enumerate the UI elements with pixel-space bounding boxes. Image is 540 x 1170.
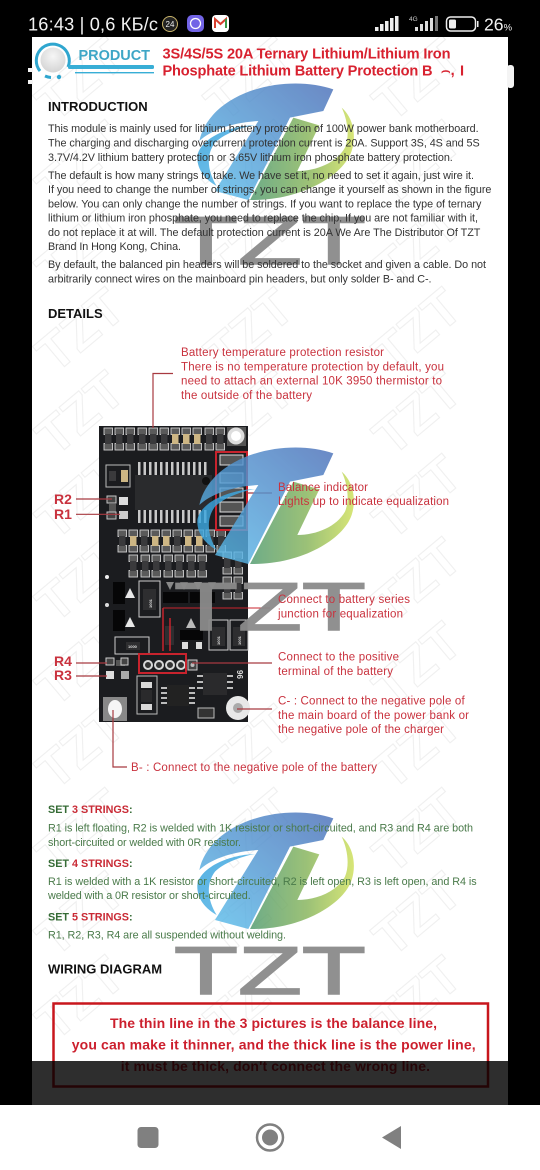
small diagonal TZT watermarks: TZT [26,862,136,968]
small diagonal TZT watermarks: TZT [363,612,473,718]
callout: series junction: junction for equalization [277,608,403,620]
app overlay tabs at sheet edges [28,65,514,88]
small diagonal TZT watermarks: TZT [363,27,473,133]
small diagonal TZT watermarks: TZT [195,111,305,217]
TZT wordmark top: TZT [174,202,366,279]
resistor labels [54,491,72,683]
icon: 4G signal [409,16,438,31]
introduction text: If you need to change the number of strings, you can change it yourself as shown in the figure [48,184,491,196]
highlight boxes on board [139,452,270,673]
callout: C-: C- : Connect to the negative pole of [278,696,465,708]
callout: balance indicator: Lights up to indicate equalization [278,496,449,508]
clock and network speed: 16:43 | 0,6 КБ/с [28,14,158,34]
small diagonal TZT watermarks [26,27,473,1052]
icon: 4G signal: 4G [409,16,418,23]
callout: temperature resistor: the outside of the battery [181,390,312,402]
introduction text: below. You can only change the number of strings. If you want to replace the type of ternary [48,198,482,210]
icon: nav square [138,1127,158,1148]
callout: positive terminal: terminal of the battery [278,666,393,678]
small diagonal TZT watermarks: TZT [363,695,473,801]
battery percent: 26% [484,14,513,34]
board resistors: 1001 [148,598,153,608]
board resistors: 1000 [128,644,138,649]
second and third component rows [118,530,242,599]
introduction text: Brand In Hong Kong, China. [48,241,181,253]
product header badge: PRODUCT [78,48,150,64]
balance indicator components [220,455,243,526]
small diagonal TZT watermarks: TZT [363,445,473,551]
small diagonal TZT watermarks: TZT [363,194,473,300]
introduction text [48,123,491,286]
small diagonal TZT watermarks: TZT [26,111,136,217]
small diagonal TZT watermarks: TZT [26,361,136,467]
white navigation bar [0,1105,540,1170]
TZT wordmark middle: TZT [174,568,366,645]
icon: nav home [257,1124,283,1150]
set 3 strings: short-circuited or welded with 0R resistor. [48,837,241,849]
small diagonal TZT watermarks: TZT [195,695,305,801]
product title: ⌢, [441,63,455,79]
small diagonal TZT watermarks: TZT [26,445,136,551]
set 4 strings [47,858,477,902]
warning box: you can make it thinner, and the thick line is the power line, [72,1036,476,1052]
board resistors: 1001 [237,635,242,645]
power transistors and diodes [105,575,216,649]
small diagonal TZT watermarks: TZT [363,779,473,885]
small diagonal TZT watermarks: TZT [26,946,136,1052]
introduction text: By default, the balanced pin headers will be soldered to the socket and given a cable. Do not [48,259,486,271]
main chip [135,462,212,523]
warning box: it must be thick, don't connect the wrong line. [121,1058,430,1074]
small diagonal TZT watermarks: TZT [195,27,305,133]
callout: temperature resistor: There is no temperature protection by default, you [181,362,444,374]
set 3 strings: R1 is left floating, R2 is welded with 1K resistor or short-circuited, and R3 and R4 are both [48,822,473,834]
small diagonal TZT watermarks: TZT [195,361,305,467]
R3 R4 pads [106,658,129,679]
callout: C-: the main board of the power bank or [278,710,469,722]
status bar [28,14,513,34]
small diagonal TZT watermarks: TZT [363,278,473,384]
small diagonal TZT watermarks: TZT [26,194,136,300]
set 5 strings: R1, R2, R3, R4 are all suspended without welding. [48,930,286,942]
lower chips: 96 [235,670,244,679]
small diagonal TZT watermarks: TZT [363,946,473,1052]
introduction text: The charging and discharging overcurrent protection current is 20A. Support 3S, 4S and 5S [48,138,480,150]
callout: temperature resistor: Battery temperature protection resistor [181,347,384,359]
set 3 strings: SET 3 STRINGS: [48,804,133,816]
small diagonal TZT watermarks: TZT [195,779,305,885]
product title: I [460,64,464,80]
introduction text: do not replace it at will. The default protection current is 20A We Are The Distributor Of TZT [48,227,481,239]
board resistors: 1001 [216,635,221,645]
small diagonal TZT watermarks: TZT [363,528,473,634]
small diagonal TZT watermarks: TZT [363,111,473,217]
callout: series junction [277,594,410,620]
introduction text: lithium or lithium iron phosphate, you need to replace the chip. If you are not familiar with it, [48,212,478,224]
small diagonal TZT watermarks: TZT [363,862,473,968]
callout: balance indicator [278,482,449,508]
product header badge [36,44,154,79]
callout: temperature resistor [181,347,444,402]
icon: viber [187,15,204,32]
TZT logo watermark bottom [197,812,354,929]
introduction text: This module is mainly used for lithium battery protection of 100W power bank motherboard. [48,123,479,135]
callout: balance indicator: Balance indicator [278,482,368,494]
TZT logo watermark middle [197,447,354,564]
introduction text: The default is how many strings to take. We have set it, no need to set it again, just wire it. [48,170,474,182]
header pins [144,660,197,670]
product title: Phosphate Lithium Battery Protection B [162,64,432,80]
bottom mounting holes [103,696,250,721]
warning box [54,1004,488,1086]
lower chips [137,670,244,718]
callout: B-: B- : Connect to the negative pole of the battery [131,762,377,774]
set 4 strings: SET 4 STRINGS: [48,858,133,870]
set 5 strings [48,912,286,942]
small diagonal TZT watermarks: TZT [195,946,305,1052]
small diagonal TZT watermarks: TZT [195,278,305,384]
resistor labels: R4 [54,653,72,669]
introduction text: arbitrarily connect wires on the mainboard pin headers, but only solder B- and C-. [48,274,432,286]
wiring diagram heading: WIRING DIAGRAM [48,962,162,976]
TZT wordmark bottom: TZT [174,932,366,1009]
callout: positive terminal: Connect to the positive [278,652,399,664]
dark bottom overlay [32,1061,508,1105]
callout: series junction: Connect to battery series [278,594,410,606]
introduction text: 3.7V/4.2V lithium battery protection or 3.65V lithium iron phosphate battery protection. [48,152,453,164]
icon: 24 badge [162,16,178,32]
small diagonal TZT watermarks: TZT [363,361,473,467]
top right mounting hole [227,427,246,446]
small diagonal TZT watermarks: TZT [26,278,136,384]
callout: temperature resistor: need to attach an external 10K 3950 thermistor to [181,376,442,388]
icon: 24 badge: 24 [166,20,175,29]
callout: positive terminal [278,652,399,678]
icon: battery [446,17,478,31]
small diagonal TZT watermarks: TZT [26,27,136,133]
small diagonal TZT watermarks: TZT [195,194,305,300]
set 4 strings: R1 is welded with a 1K resistor or short-circuited, R2 is left open, R3 is left open, and R4 is [48,876,477,888]
details heading: DETAILS [48,306,103,321]
product title [162,46,464,80]
set 3 strings [48,804,473,849]
icon: nav back [382,1126,401,1149]
small diagonal TZT watermarks: TZT [26,612,136,718]
circuit board photo [99,426,250,722]
top component row [104,428,224,450]
set 5 strings: SET 5 STRINGS: [48,912,133,924]
small diagonal TZT watermarks: TZT [195,862,305,968]
board resistors [115,581,248,654]
small diagonal TZT watermarks: TZT [26,695,136,801]
small diagonal TZT watermarks: TZT [26,779,136,885]
leader lines [76,374,272,767]
introduction heading: INTRODUCTION [48,99,148,114]
left clusters [106,465,130,519]
product title: 3S/4S/5S 20A Ternary Lithium/Lithium Iron [162,46,451,62]
set 4 strings: welded with a 0R resistor or short-circuited. [47,890,251,902]
callout: C- [278,696,469,736]
small diagonal TZT watermarks: TZT [26,528,136,634]
TZT logo watermark top [197,83,354,200]
icon: signal bars [375,16,398,31]
resistor labels: R3 [54,667,72,683]
resistor labels: R2 [54,491,72,507]
icon: gmail [212,15,229,32]
resistor labels: R1 [54,506,72,522]
warning box: The thin line in the 3 pictures is the balance line, [110,1015,437,1031]
callout: C-: the negative pole of the charger [278,724,444,736]
